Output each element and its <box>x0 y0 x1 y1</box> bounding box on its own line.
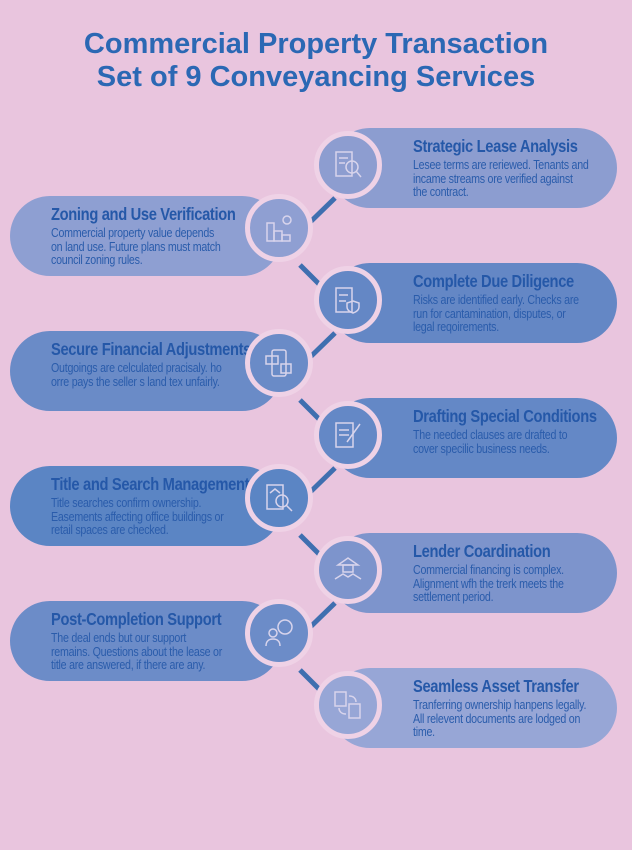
panel: post-completion support: Post-Completion Support <box>51 609 221 629</box>
panel: lender coordination <box>330 533 617 613</box>
panel: strategic lease analysis: Strategic Lease Analysis <box>413 136 578 156</box>
panel: complete due diligence: Risks are identified early. Checks are run for cantamination, disputes, or legal reqoirements. <box>413 292 579 334</box>
icon: search document <box>245 464 313 532</box>
icon: clipboard shield <box>314 266 382 334</box>
panel: complete due diligence: Complete Due Diligence <box>413 271 574 291</box>
icon: transfer documents <box>314 671 382 739</box>
panel: title and search management <box>10 466 282 546</box>
panel: seamless asset transfer <box>330 668 617 748</box>
panel: drafting special conditions <box>330 398 617 478</box>
panel: zoning and use verification <box>10 196 282 276</box>
panel: lender coordination: Commercial financing is complex. Alignment wfh the trerk meets the settlement period. <box>413 562 564 604</box>
icon: lease document <box>314 131 382 199</box>
panel: title and search management: Title searches confirm ownership. Easements affecting office buildings or retail spaces are checked. <box>51 495 224 537</box>
panel: post-completion support: The deal ends but our support remains. Questions about the lease or title are answered, if there are any. <box>51 630 222 672</box>
panel: strategic lease analysis <box>330 128 617 208</box>
title: Set of 9 Conveyancing Services <box>97 61 535 93</box>
panel: strategic lease analysis: Lesee terms are reriewed. Tenants and incame streams ore verified against the contract. <box>413 157 589 199</box>
icon: city pin <box>245 194 313 262</box>
title: Commercial Property Transaction <box>84 28 548 60</box>
panel: lender coordination: Lender Coardination <box>413 541 550 561</box>
icon: support question <box>245 599 313 667</box>
icon: bank handshake <box>314 536 382 604</box>
panel: zoning and use verification: Commercial property value depends on land use. Future plans must match council zoning rules. <box>51 225 220 267</box>
panel: title and search management: Title and Search Management <box>51 474 249 494</box>
panel: drafting special conditions: The needed clauses are drafted to cover specilic business needs. <box>413 427 567 456</box>
panel: complete due diligence <box>330 263 617 343</box>
panel: seamless asset transfer: Tranferring ownership hanpens legally. All relevent documents are lodged on time. <box>413 697 586 739</box>
icon: document pen <box>314 401 382 469</box>
panel: secure financial adjustments: Outgoings are celculated pracisaly. ho orre pays the seller s land tex unfairly. <box>51 360 222 388</box>
panel: seamless asset transfer: Seamless Asset Transfer <box>413 676 579 696</box>
panel: secure financial adjustments <box>10 331 282 411</box>
panel: post-completion support <box>10 601 282 681</box>
icon: phone card <box>245 329 313 397</box>
panel: secure financial adjustments: Secure Financial Adjustments <box>51 339 251 359</box>
panel: drafting special conditions: Drafting Special Conditions <box>413 406 597 426</box>
title <box>84 28 548 93</box>
panel: zoning and use verification: Zoning and Use Verification <box>51 204 236 224</box>
